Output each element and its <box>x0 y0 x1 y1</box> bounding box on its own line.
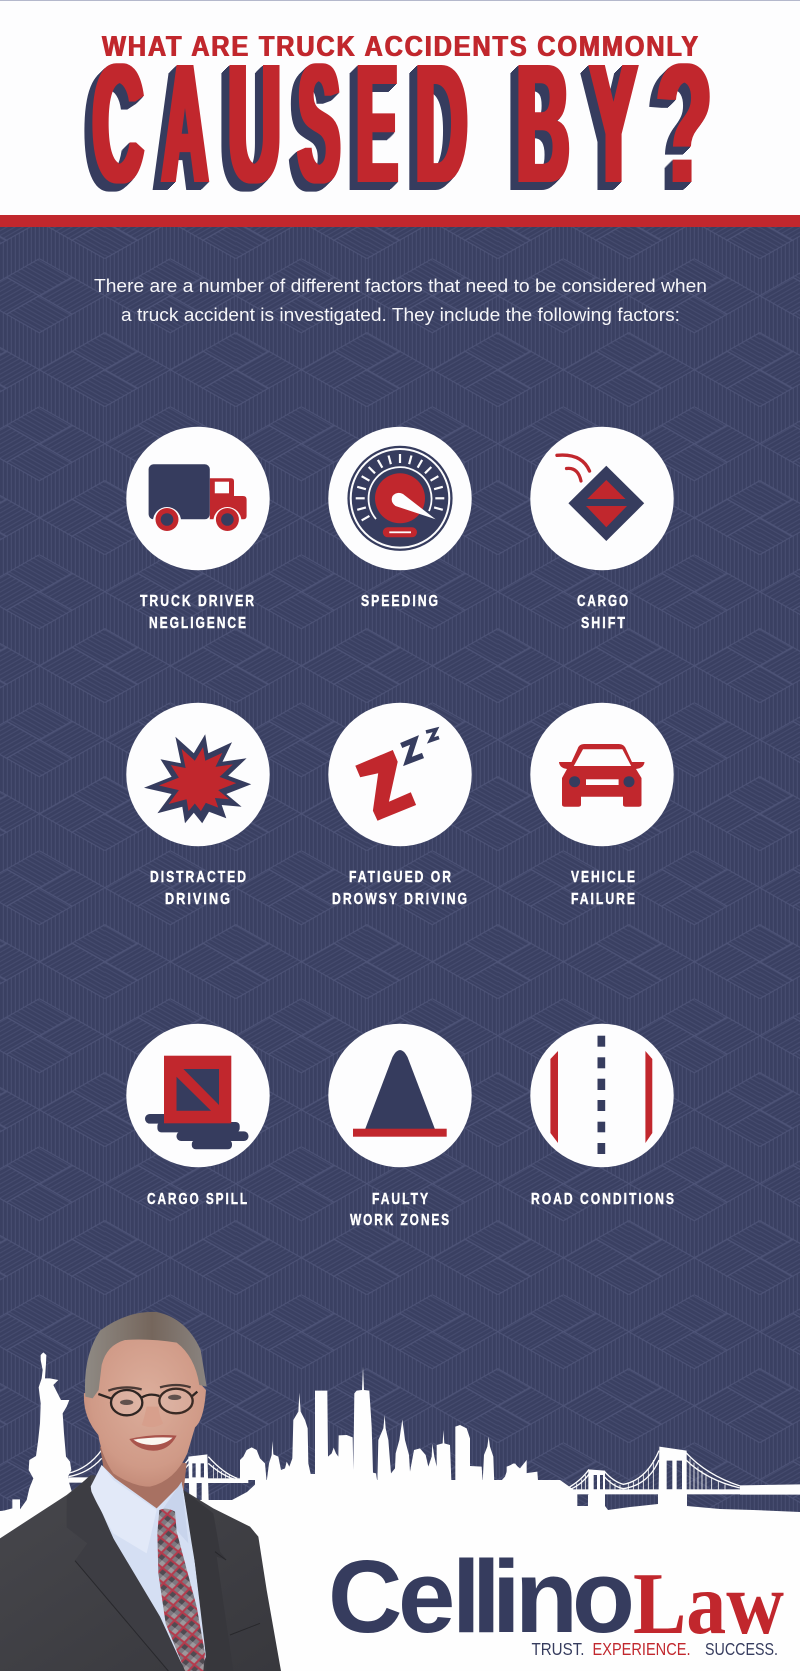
panel: cargo shift <box>530 427 674 632</box>
label: SHIFT <box>581 615 627 632</box>
label: FATIGUED OR <box>349 869 453 886</box>
icon: speedometer <box>347 446 453 551</box>
label: VEHICLE <box>571 869 637 886</box>
label <box>150 869 248 908</box>
label: ROAD CONDITIONS <box>531 1191 676 1208</box>
heading: CAUSED BY?: E <box>356 29 398 219</box>
neck <box>100 1447 187 1510</box>
tagline: TRUST. <box>532 1639 584 1659</box>
label <box>350 1191 451 1229</box>
heading: CAUSED BY?: ? <box>656 29 712 219</box>
heading: CAUSED BY?: Y <box>590 29 637 219</box>
glasses <box>98 1389 197 1415</box>
label: CARGO SPILL <box>147 1191 249 1208</box>
city skyline silhouette <box>0 1352 800 1671</box>
suit jacket <box>0 1475 281 1671</box>
intro text: There are a number of different factors that need to be considered when <box>94 275 707 296</box>
label: SPEEDING <box>361 593 440 610</box>
icon: shifting diamond cargo <box>557 455 644 541</box>
intro text: a truck accident is investigated. They include the following factors: <box>121 304 680 325</box>
logo: Cellino Law <box>328 1539 784 1659</box>
panel: fatigued or drowsy driving <box>328 703 472 908</box>
statue of liberty and left waterfront <box>0 1352 100 1600</box>
panel: vehicle failure <box>530 703 674 908</box>
header panel <box>0 0 800 219</box>
label <box>140 593 256 632</box>
portrait of attorney <box>0 1312 281 1671</box>
icon: road <box>550 1036 652 1154</box>
heading: CAUSED BY?: D <box>416 29 468 219</box>
label: WORK ZONES <box>350 1212 451 1229</box>
brooklyn bridge <box>567 1447 800 1507</box>
icon: sleep Z's <box>355 730 439 821</box>
waterfront between skyline and bridges <box>507 1463 577 1523</box>
icon: car <box>559 744 644 807</box>
panel: distracted driving <box>126 703 270 908</box>
eyebrows <box>108 1385 191 1391</box>
heading: CAUSED BY?: U <box>228 29 281 219</box>
heading: first line: WHAT ARE TRUCK ACCIDENTS COMMONLY <box>102 31 700 63</box>
heading: CAUSED BY?: B <box>516 29 570 219</box>
icon: truck <box>149 464 247 535</box>
heading: CAUSED BY?: S <box>298 29 340 219</box>
tagline: SUCCESS. <box>705 1639 778 1659</box>
panel: road conditions <box>530 1024 676 1208</box>
label: NEGLIGENCE <box>149 615 248 632</box>
label: DRIVING <box>165 891 232 908</box>
eyes <box>120 1395 181 1405</box>
red divider bar <box>0 215 800 227</box>
icon: burst <box>144 734 251 823</box>
panel: truck driver negligence <box>126 427 270 632</box>
hair <box>85 1312 207 1398</box>
heading: CAUSED BY?: A <box>162 29 208 219</box>
icon: spilled crate <box>145 1056 248 1149</box>
head and face <box>84 1333 206 1487</box>
panel: faulty work zones <box>328 1024 472 1229</box>
label: FAILURE <box>571 891 637 908</box>
smile <box>129 1435 177 1451</box>
tagline: EXPERIENCE. <box>592 1639 690 1659</box>
label: DROWSY DRIVING <box>332 891 469 908</box>
left bridge span <box>68 1450 102 1483</box>
heading: CAUSED BY? <box>92 29 712 219</box>
heading: CAUSED BY?: C <box>92 29 144 219</box>
label <box>577 593 630 632</box>
label: DISTRACTED <box>150 869 248 886</box>
tagline <box>532 1639 778 1659</box>
logo: Cellino Law: Cellino <box>328 1539 635 1654</box>
label <box>332 869 469 908</box>
logo: Cellino Law: Law <box>633 1556 784 1653</box>
suit lapels <box>67 1475 185 1671</box>
intro text <box>94 275 707 325</box>
icon: traffic cone <box>353 1050 447 1137</box>
nose shadow <box>142 1407 163 1427</box>
necktie <box>157 1509 205 1671</box>
label: TRUCK DRIVER <box>140 593 256 610</box>
label: CARGO <box>577 593 630 610</box>
panel: speeding <box>328 427 472 610</box>
panel: cargo spill <box>126 1024 270 1208</box>
label: FAULTY <box>372 1191 430 1208</box>
midtown skyline <box>240 1367 527 1560</box>
label <box>571 869 637 908</box>
east river bridge near portrait <box>182 1454 248 1500</box>
shirt <box>91 1465 206 1671</box>
ground <box>0 1480 800 1671</box>
